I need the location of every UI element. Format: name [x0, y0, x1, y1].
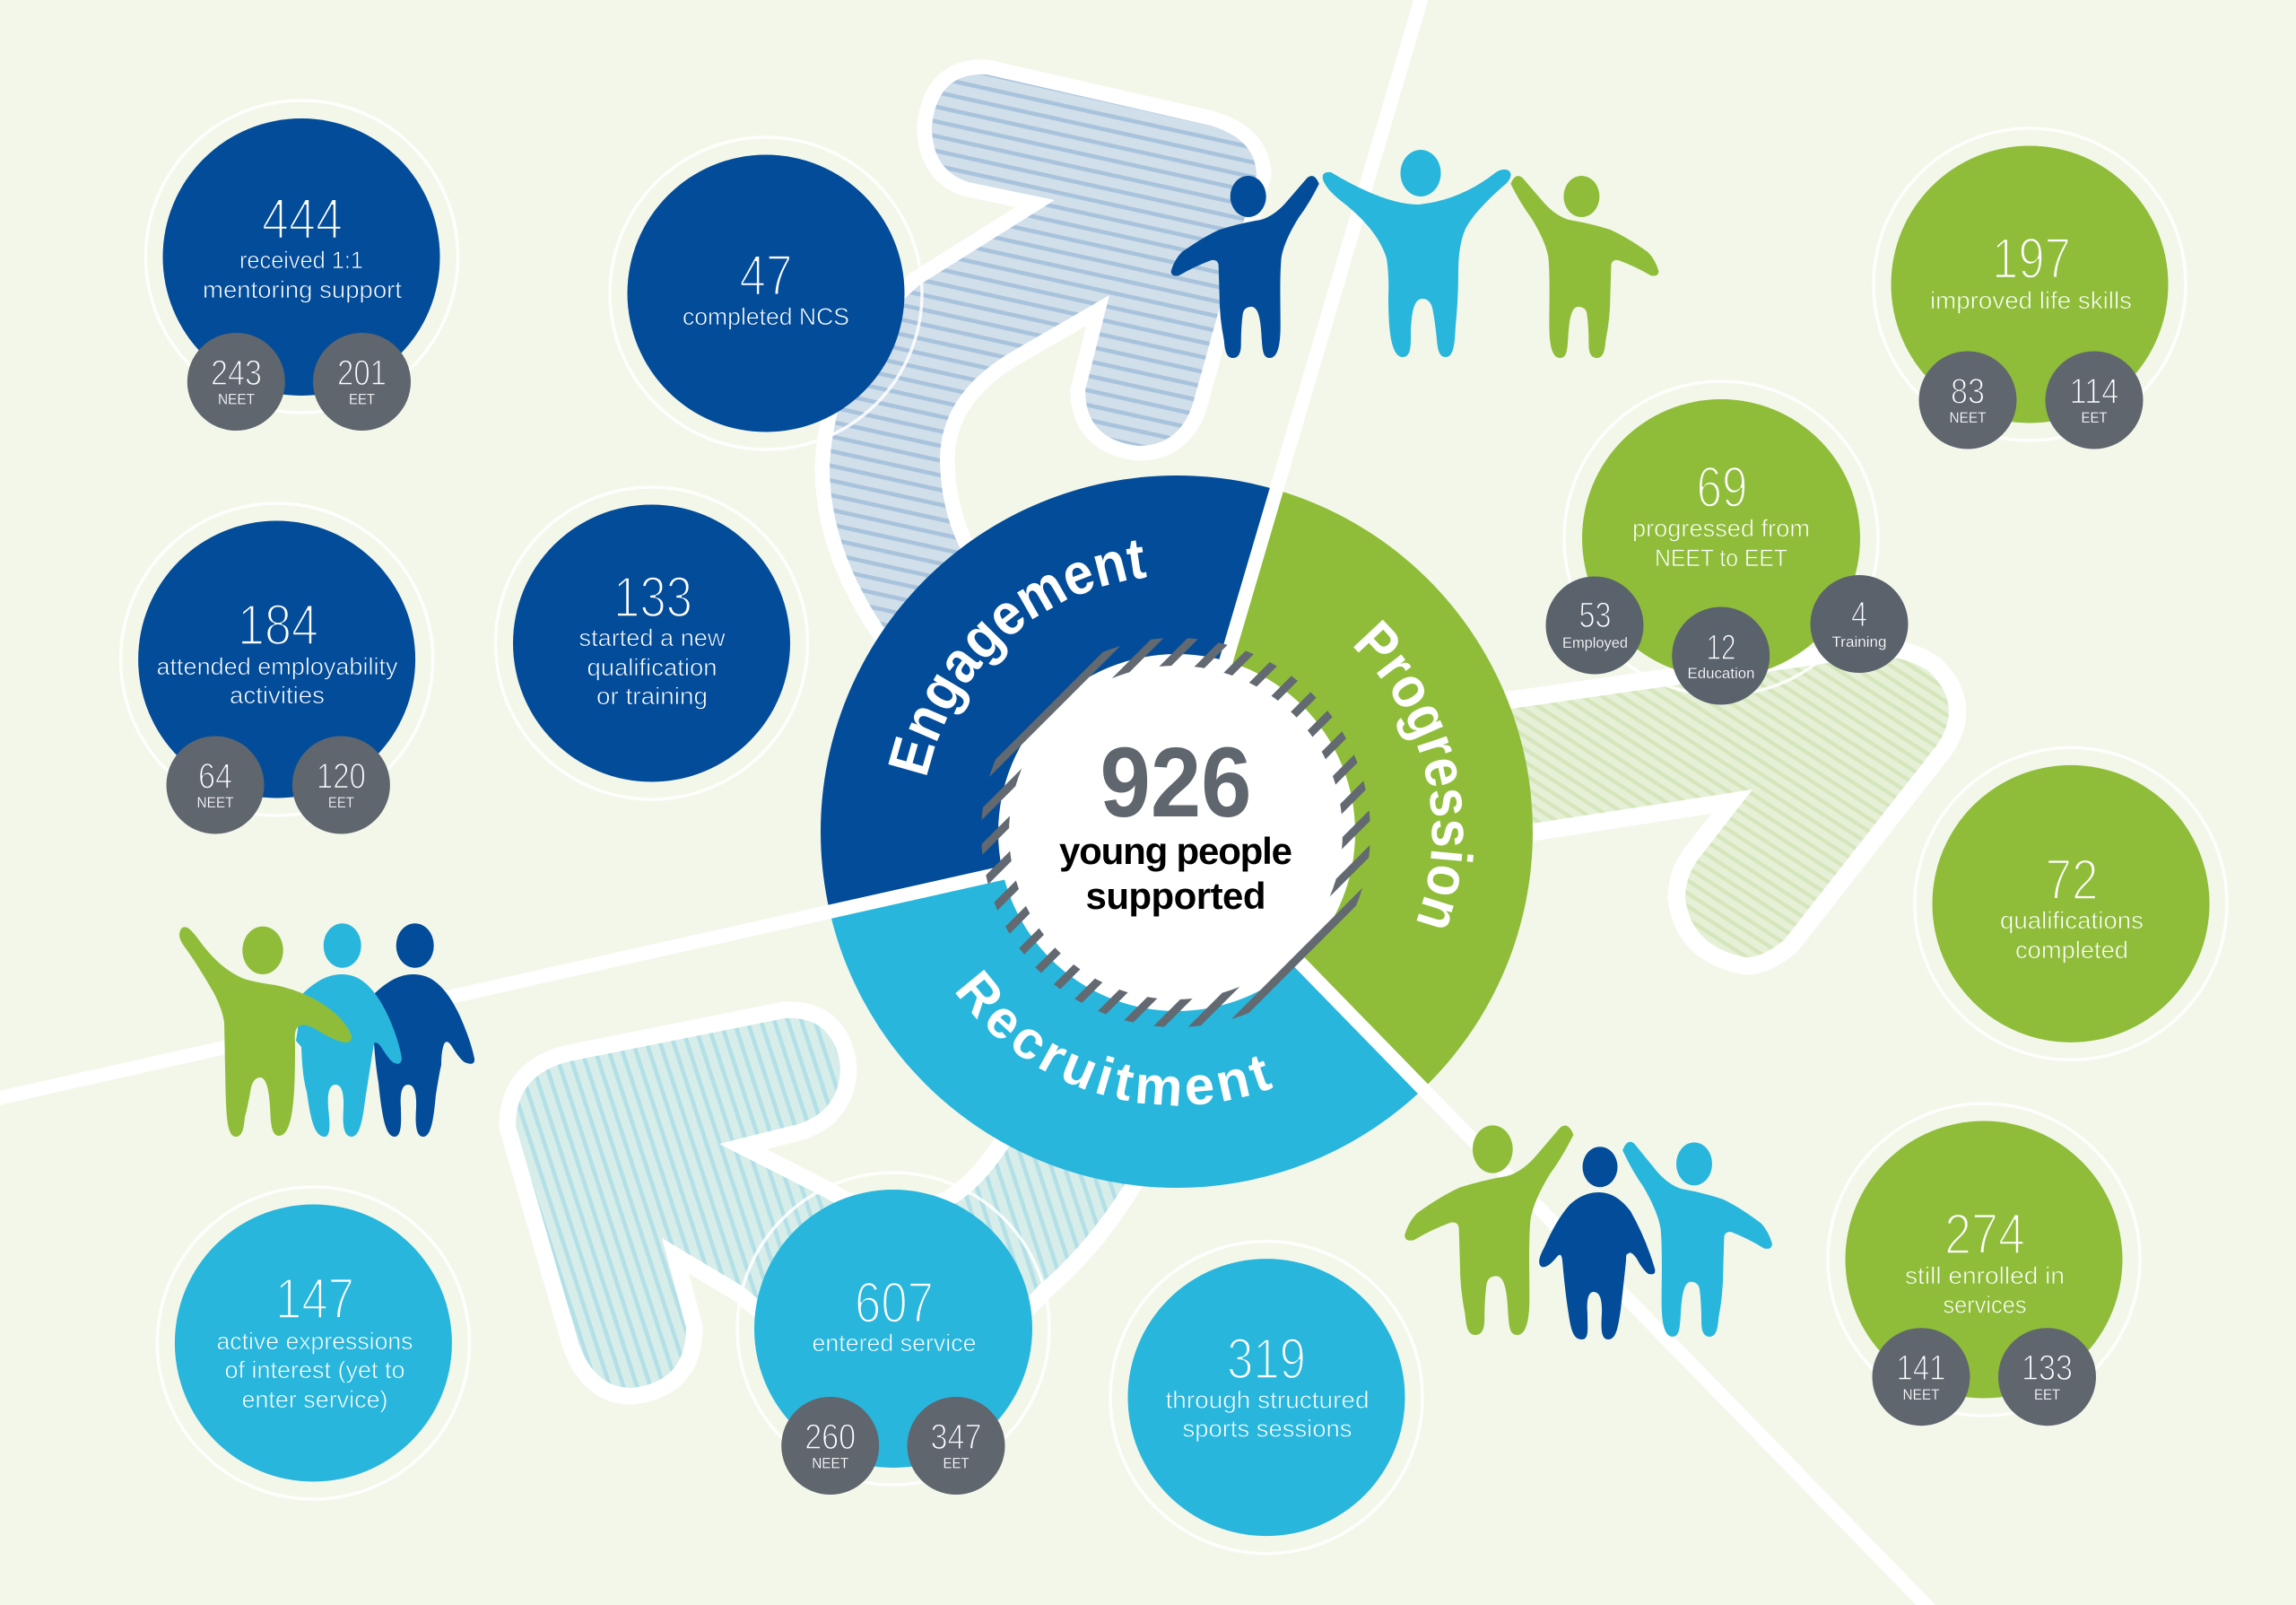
badge: 133 EET — [1998, 1328, 2096, 1426]
segment: recruitment — [831, 879, 1418, 1188]
badge: 347 EET — [908, 1397, 1004, 1495]
panel: 607 entered service — [737, 1173, 1049, 1495]
badge: 243 NEET: NEET — [218, 391, 255, 408]
heading: Recruitment: Recruitment — [955, 969, 1274, 1106]
icon: navy person — [1171, 176, 1319, 358]
badge: 64 NEET: 64 — [198, 757, 232, 797]
icon: green person — [1405, 1125, 1573, 1335]
segment: progression — [1232, 492, 1533, 1084]
badge: 114 EET: 114 — [2070, 371, 2118, 411]
panel: 274 still enrolled: still enrolled in — [1905, 1262, 2065, 1289]
total caption: young people — [1059, 830, 1292, 872]
panel: 47 completed NCS: 47 — [739, 243, 793, 308]
panel: 444 received mentoring: received 1:1 — [239, 247, 363, 274]
arrow: recruitment (cyan, hatched) — [516, 1018, 1130, 1388]
badge: 12 Education: 12 — [1706, 628, 1736, 667]
panel: 444 received mentoring — [145, 100, 457, 431]
panel: 133 new qualification: or training — [596, 683, 708, 710]
badge: 347 EET: EET — [944, 1455, 969, 1471]
panel: 69 progressed NEET to EET: progressed from — [1632, 515, 1810, 542]
icon: green person — [179, 927, 352, 1137]
icon: green person — [1510, 176, 1658, 358]
panel: 133 new qualification: 133 — [613, 565, 692, 630]
badge: 201 EET: EET — [349, 391, 375, 408]
segment: engagement — [821, 475, 1270, 905]
badge: 4 Training: 4 — [1851, 595, 1867, 634]
badge: 141 NEET: NEET — [1903, 1386, 1939, 1403]
panel: 147 expressions of interest — [157, 1187, 469, 1499]
panel: 444 received mentoring: 444 — [262, 187, 343, 251]
badge: 83 NEET — [1919, 352, 2016, 449]
heading: Progression: Progression — [1353, 619, 1474, 928]
icon: cyan person — [1622, 1142, 1772, 1337]
badge: 141 NEET: 141 — [1896, 1348, 1946, 1388]
icon: cyan person — [296, 923, 402, 1137]
arrow: engagement (blue, hatched) — [830, 74, 1257, 646]
badge: 114 EET — [2045, 352, 2144, 449]
panel: 274 still enrolled: services — [1943, 1292, 2027, 1319]
panel: 147 expressions of interest: of interest (yet to — [224, 1356, 405, 1383]
hatched ring — [981, 638, 1370, 1027]
icon: cyan person — [1323, 150, 1511, 357]
panel: 147 expressions of interest: enter service) — [242, 1386, 387, 1413]
badge: 114 EET: EET — [2081, 409, 2108, 426]
panel: 69 progressed NEET to EET: NEET to EET — [1655, 545, 1787, 571]
panel: 133 new qualification: started a new — [579, 624, 726, 651]
panel: 47 completed NCS — [610, 137, 922, 449]
panel: 197 improved life skills — [1874, 128, 2186, 449]
panel: 147 expressions of interest: 147 — [275, 1267, 354, 1331]
badge: 133 EET: 133 — [2022, 1348, 2073, 1388]
panel: 274 still enrolled — [1828, 1103, 2140, 1426]
badge: 64 NEET: NEET — [197, 794, 233, 811]
icon: navy person — [1539, 1147, 1655, 1339]
badge: 260 NEET: NEET — [812, 1455, 848, 1471]
panel: 184 employability: attended employability — [156, 653, 398, 680]
badge: 347 EET: 347 — [931, 1417, 981, 1457]
badge: 120 EET: EET — [328, 794, 354, 811]
panel: 72 qualifications completed: qualifications — [2000, 907, 2144, 934]
badge: 53 Employed — [1546, 576, 1643, 675]
panel: 319 sports sessions: 319 — [1227, 1326, 1306, 1391]
panel: 197 improved life skills: 197 — [1992, 226, 2071, 291]
badge: 201 EET: 201 — [337, 353, 387, 393]
panel: 319 sports sessions: sports sessions — [1182, 1416, 1352, 1443]
badge: 243 NEET: 243 — [211, 353, 262, 393]
panel: 274 still enrolled: 274 — [1944, 1202, 2025, 1267]
panel: 72 qualifications completed — [1915, 747, 2227, 1060]
badge: 120 EET: 120 — [317, 757, 366, 797]
badge: 141 NEET — [1873, 1328, 1970, 1426]
panel: 47 completed NCS: completed NCS — [683, 303, 849, 330]
icon: three people group (lower right) — [1405, 1125, 1772, 1339]
badge: 83 NEET: 83 — [1951, 371, 1985, 411]
icon: navy person — [374, 923, 474, 1137]
badge: 120 EET — [292, 736, 390, 834]
panel: 319 sports sessions: through structured — [1166, 1387, 1369, 1414]
heading: Engagement: Engagement — [888, 540, 1147, 775]
panel: 69 progressed NEET to EET: 69 — [1697, 455, 1747, 519]
badge: 133 EET: EET — [2034, 1386, 2060, 1403]
panel: 133 new qualification — [495, 487, 807, 799]
badge: 83 NEET: NEET — [1950, 409, 1986, 426]
badge: 243 NEET — [187, 333, 285, 431]
badge: 260 NEET: 260 — [804, 1417, 856, 1457]
icon: three people high-fiving (top) — [1171, 150, 1658, 358]
badge: 260 NEET — [781, 1397, 879, 1495]
panel: 69 progressed NEET to EET — [1546, 381, 1909, 705]
badge: 4 Training — [1810, 575, 1909, 673]
panel: 184 employability: activities — [230, 682, 325, 709]
panel: 184 employability: 184 — [238, 592, 318, 657]
badge: 53 Employed: Employed — [1562, 634, 1628, 651]
panel: 607 entered service: entered service — [813, 1330, 976, 1356]
panel: 444 received mentoring: mentoring support — [203, 276, 403, 303]
badge: 53 Employed: 53 — [1578, 596, 1611, 635]
badge: 201 EET — [313, 333, 411, 431]
badge: 12 Education — [1672, 606, 1770, 705]
total caption: supported — [1085, 875, 1266, 917]
panel: 607 entered service: 607 — [855, 1270, 934, 1335]
panel: 133 new qualification: qualification — [587, 654, 718, 681]
total caption — [1059, 830, 1292, 917]
panel: 72 qualifications completed: 72 — [2045, 847, 2099, 912]
centre circle: 926 young people supported — [981, 638, 1370, 1027]
panel: 184 employability — [121, 503, 433, 834]
donut chart: three stages — [821, 475, 1533, 1188]
icon: three people arm in arm (left) — [179, 923, 474, 1137]
arrow: progression (green, hatched) — [1480, 657, 1949, 957]
badge: 12 Education: Education — [1688, 665, 1754, 682]
badge: 64 NEET — [167, 736, 264, 834]
panel: 319 sports sessions — [1110, 1242, 1422, 1554]
panel: 72 qualifications completed: completed — [2015, 937, 2128, 964]
panel: 197 improved life skills: improved life skills — [1930, 287, 2132, 314]
badge: 4 Training: Training — [1831, 633, 1887, 650]
total number: 926 — [1100, 728, 1252, 838]
panel: 147 expressions of interest: active expressions — [217, 1328, 413, 1355]
